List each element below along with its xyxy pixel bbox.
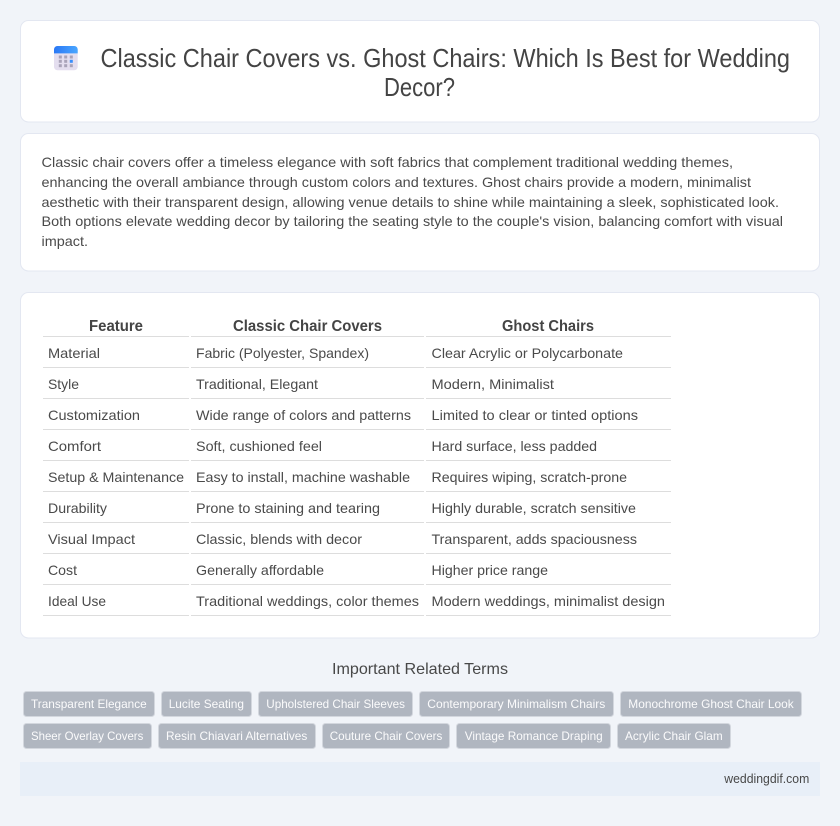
tag: Sheer Overlay Covers xyxy=(31,729,143,743)
row: Durability xyxy=(48,500,636,516)
text block: intro: enhancing the overall ambiance through custom colors and textures. Ghost chairs provide a modern, minimalist xyxy=(42,174,751,190)
tag: Contemporary Minimalism Chairs xyxy=(427,697,605,711)
tag xyxy=(420,692,614,716)
tag: Upholstered Chair Sleeves xyxy=(266,697,405,711)
tag xyxy=(258,692,412,716)
row: Cost: Generally affordable xyxy=(196,562,324,578)
row: Material: Fabric (Polyester, Spandex) xyxy=(196,345,369,361)
title: Decor? xyxy=(384,74,455,102)
row: Cost xyxy=(48,562,548,578)
icon: calendar xyxy=(54,46,78,70)
tag xyxy=(620,692,802,716)
row: Visual Impact: Classic, blends with decor xyxy=(196,531,362,547)
table header xyxy=(89,318,594,335)
panel: comparison table xyxy=(20,292,820,638)
row: Visual Impact: Transparent, adds spaciousness xyxy=(432,531,637,547)
row: Ideal Use: Ideal Use xyxy=(48,593,106,609)
row: Customization xyxy=(48,407,638,423)
row: Style: Style xyxy=(48,376,79,392)
row: Cost: Higher price range xyxy=(432,562,548,578)
panel: header xyxy=(20,20,820,122)
row: Comfort xyxy=(48,438,597,454)
tag: Resin Chiavari Alternatives xyxy=(166,729,307,743)
row: Material xyxy=(48,345,623,361)
title xyxy=(100,45,790,102)
text block: intro: aesthetic with their transparent design, allowing venue details to shine while maintaining a sleek, sophisticated look. xyxy=(42,194,779,210)
tag xyxy=(24,724,152,748)
text block: intro xyxy=(42,154,783,249)
tag xyxy=(158,724,316,748)
text block: intro: Classic chair covers offer a timeless elegance with soft fabrics that complement traditional wedding themes, xyxy=(42,154,733,170)
tag: Monochrome Ghost Chair Look xyxy=(628,697,795,711)
tag: Vintage Romance Draping xyxy=(465,729,603,743)
table header: Classic Chair Covers xyxy=(233,318,382,335)
tag xyxy=(618,724,730,748)
row: Style xyxy=(48,376,554,392)
panel: intro paragraph xyxy=(20,134,820,271)
row: Comfort: Comfort xyxy=(48,438,101,454)
row: Setup & Maintenance: Requires wiping, scratch-prone xyxy=(432,469,627,485)
row: Customization: Customization xyxy=(48,407,140,423)
row: Customization: Wide range of colors and patterns xyxy=(196,407,411,423)
row: Ideal Use: Modern weddings, minimalist design xyxy=(432,593,665,609)
text block: intro: impact. xyxy=(42,233,88,249)
title: Classic Chair Covers vs. Ghost Chairs: Which Is Best for Wedding xyxy=(100,45,790,73)
row: Comfort: Soft, cushioned feel xyxy=(196,438,322,454)
row: Material: Material xyxy=(48,345,100,361)
row: Setup & Maintenance: Setup & Maintenance xyxy=(48,469,184,485)
row: Material: Clear Acrylic or Polycarbonate xyxy=(432,345,623,361)
row: Visual Impact: Visual Impact xyxy=(48,531,135,547)
table header: Feature xyxy=(89,318,143,335)
footer xyxy=(20,762,820,796)
row: Durability: Durability xyxy=(48,500,107,516)
tag xyxy=(322,724,450,748)
row: Setup & Maintenance xyxy=(48,469,627,485)
row: Visual Impact xyxy=(48,531,637,547)
footer: weddingdif.com xyxy=(723,772,809,786)
tag: Transparent Elegance xyxy=(31,697,147,711)
row: Cost: Cost xyxy=(48,562,77,578)
row: Durability: Highly durable, scratch sensitive xyxy=(432,500,636,516)
tag: Acrylic Chair Glam xyxy=(625,729,723,743)
row: Durability: Prone to staining and tearing xyxy=(196,500,380,516)
row: Ideal Use: Traditional weddings, color themes xyxy=(196,593,419,609)
text block: intro: Both options elevate wedding decor by tailoring the seating style to the couple's vision, balancing comfort with visual xyxy=(42,213,783,229)
tag: Lucite Seating xyxy=(169,697,244,711)
row: Style: Modern, Minimalist xyxy=(432,376,554,392)
tag xyxy=(456,724,610,748)
heading: important related terms: Important Related Terms xyxy=(332,661,508,678)
row: Comfort: Hard surface, less padded xyxy=(432,438,597,454)
tag: Couture Chair Covers xyxy=(330,729,442,743)
row: Customization: Limited to clear or tinted options xyxy=(432,407,638,423)
row: Style: Traditional, Elegant xyxy=(196,376,318,392)
table header: Ghost Chairs xyxy=(502,318,594,335)
tag xyxy=(24,692,154,716)
tag xyxy=(162,692,252,716)
tag list xyxy=(24,692,802,748)
row: Ideal Use xyxy=(48,593,665,609)
row: Setup & Maintenance: Easy to install, machine washable xyxy=(196,469,410,485)
